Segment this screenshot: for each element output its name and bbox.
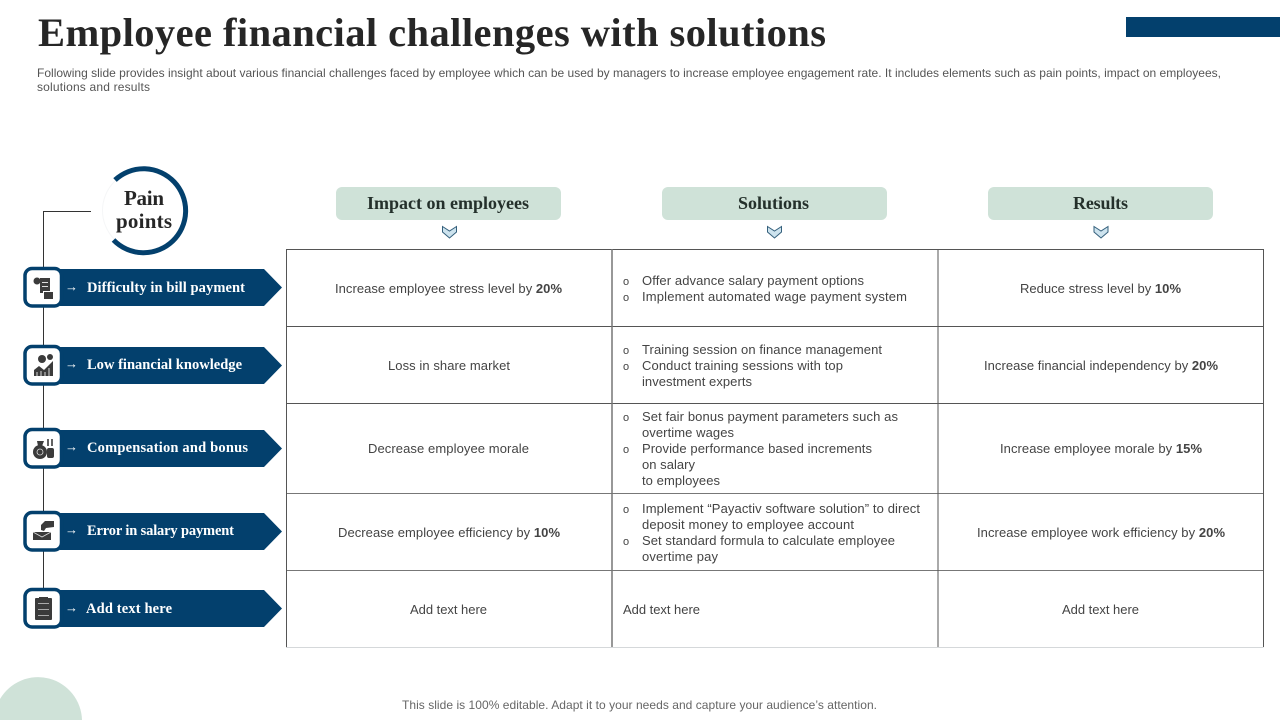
column: impact on employees text: Decrease employee morale	[368, 441, 529, 456]
column: solutions text: overtime pay	[642, 549, 718, 564]
pain point 1: difficulty in bill payment: Difficulty in bill payment	[87, 280, 245, 296]
column heading: impact on employees	[336, 187, 561, 220]
column: solutions text: o	[623, 361, 629, 373]
column: impact on employees text: Add text here	[410, 602, 487, 617]
column heading: impact on employees: Impact on employees	[367, 193, 529, 213]
column: solutions text: deposit money to employee account	[642, 517, 854, 532]
icon: clipboard	[35, 597, 52, 620]
decorative corner circle	[0, 677, 82, 720]
pain point 2: low financial knowledge: Low financial knowledge	[87, 357, 243, 373]
column: results text: Increase employee morale by 15%	[1000, 441, 1202, 456]
icon: hand and envelope	[33, 521, 54, 540]
column: solutions text: Set standard formula to calculate employee	[642, 533, 895, 548]
pain point 5: add text here: →	[65, 600, 78, 615]
column: solutions text: o	[623, 504, 629, 516]
pain point 4: error in salary payment	[25, 512, 282, 550]
pain point 1: difficulty in bill payment	[25, 268, 282, 306]
pain point 3: compensation and bonus: →	[65, 439, 78, 454]
column: solutions text: o	[623, 345, 629, 357]
column heading: solutions: Solutions	[738, 193, 809, 213]
pain point 2: low financial knowledge	[25, 346, 282, 384]
pain points badge: Pain	[124, 186, 164, 210]
timeline connector	[44, 212, 91, 600]
column: solutions text: investment experts	[642, 374, 752, 389]
column: results text: Increase employee work efficiency by 20%	[977, 525, 1225, 540]
column: solutions text: to employees	[642, 473, 720, 488]
pain point 1: difficulty in bill payment: →	[65, 279, 78, 294]
column: impact on employees text: Increase employee stress level by 20%	[335, 281, 562, 296]
column: solutions text: o	[623, 536, 629, 548]
table grid	[286, 249, 1264, 648]
column: results text: Add text here	[1062, 602, 1139, 617]
subtitle text block	[37, 66, 1221, 94]
column: solutions text: o	[623, 444, 629, 456]
column: solutions text: o	[623, 276, 629, 288]
column: solutions text	[623, 273, 920, 617]
column: solutions text: o	[623, 412, 629, 424]
column: solutions text: Provide performance based increments	[642, 441, 872, 456]
column: results text: Reduce stress level by 10%	[1020, 281, 1181, 296]
footer note: This slide is 100% editable. Adapt it to your needs and capture your audience’s attention.	[402, 698, 877, 712]
icon: question and growth chart	[34, 354, 53, 376]
pain point 4: error in salary payment: Error in salary payment	[87, 523, 234, 539]
pain point 3: compensation and bonus	[25, 430, 282, 467]
column: impact on employees text: Decrease employee efficiency by 10%	[338, 525, 560, 540]
pain point 5: add text here: Add text here	[86, 601, 173, 617]
column: solutions text: Conduct training sessions with top	[642, 358, 843, 373]
column: solutions text: on salary	[642, 457, 696, 472]
column: solutions text: Training session on finance management	[642, 342, 882, 357]
column: solutions text: Implement “Payactiv software solution” to direct	[642, 501, 920, 516]
icon: bills and document	[34, 278, 54, 300]
column: solutions text: Offer advance salary payment options	[642, 273, 864, 288]
pain points badge: points	[116, 209, 172, 233]
column: results text	[977, 281, 1225, 617]
icon: chevron down impact	[442, 226, 456, 238]
column heading: solutions	[662, 187, 887, 220]
pain points badge	[102, 169, 186, 253]
pain point 2: low financial knowledge: →	[65, 356, 78, 371]
title: Employee financial challenges with solutions	[38, 10, 826, 55]
column: solutions text: o	[623, 292, 629, 304]
column: impact on employees text	[335, 281, 562, 617]
column: solutions text: Implement automated wage payment system	[642, 289, 907, 304]
pain point 3: compensation and bonus: Compensation and bonus	[87, 440, 248, 456]
column: solutions text: overtime wages	[642, 425, 734, 440]
subtitle text block: solutions and results	[37, 80, 150, 94]
column heading: results: Results	[1073, 193, 1128, 213]
icon: money bag and coins	[33, 439, 54, 459]
column: solutions text: Add text here	[623, 602, 700, 617]
column: results text: Increase financial independency by 20%	[984, 358, 1218, 373]
column: solutions text: Set fair bonus payment parameters such as	[642, 409, 898, 424]
pain point 5: add text here	[25, 590, 282, 627]
icon: chevron down solutions	[768, 226, 782, 238]
pain point 4: error in salary payment: →	[65, 522, 78, 537]
column heading: results	[988, 187, 1213, 220]
icon: chevron down results	[1094, 226, 1108, 238]
subtitle text block: Following slide provides insight about various financial challenges faced by employee which can be used by managers to increase employee engagement rate. It includes elements such as pain points, impact on employees,	[37, 66, 1221, 80]
top right accent bar	[1126, 17, 1280, 37]
column: impact on employees text: Loss in share market	[388, 358, 510, 373]
